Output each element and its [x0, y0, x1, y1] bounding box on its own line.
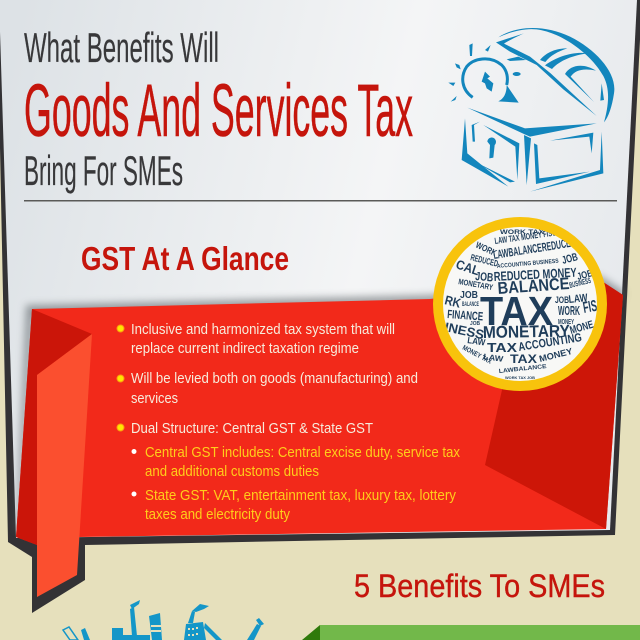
- tax word globe: JOB: [576, 268, 594, 283]
- bullet list: [117, 321, 460, 523]
- right fold: [485, 280, 623, 529]
- tax word globe: LAWBALANCEREDUCE: [492, 236, 572, 262]
- title: Bring For SMEs: [24, 147, 183, 194]
- tax word globe: RK: [443, 292, 463, 311]
- tax word globe: WORK: [558, 303, 580, 318]
- tax word globe: TAX: [487, 340, 517, 355]
- icon: treasure chest with light bulb: [448, 28, 614, 192]
- tax word globe: WORK: [474, 240, 499, 258]
- section heading: 5 Benefits To SMEs: 5 Benefits To SMEs: [354, 568, 605, 604]
- tax word globe: LAW: [568, 292, 589, 306]
- left fold, orange strip: [37, 334, 92, 597]
- tax word globe: REDUCED MONEY: [493, 265, 577, 284]
- tax word globe: JOB: [460, 290, 478, 301]
- tax word globe: MONEY: [558, 319, 574, 326]
- bullet list: State GST: VAT, entertainment tax, luxury tax, lottery: [145, 487, 456, 504]
- tax word globe: TAX: [480, 288, 553, 334]
- bullet list: services: [131, 390, 178, 407]
- panel shadow: [16, 276, 625, 530]
- tax word globe: ACCOUNTING BUSINESS: [497, 259, 559, 270]
- tax word globe: LAW: [467, 335, 486, 348]
- bullet list: Inclusive and harmonized tax system that will: [131, 321, 395, 338]
- chimney factory: [112, 600, 162, 640]
- tax word globe: LAW TAX MONEY FISC: [494, 227, 557, 246]
- tax word globe: JOB: [475, 269, 494, 285]
- bullet list: and additional customs duties: [145, 463, 319, 480]
- tax word globe: LAW: [483, 352, 504, 364]
- bullet list: Dual Structure: Central GST & State GST: [131, 420, 373, 437]
- tax word globe: MONEY TAX: [461, 345, 493, 366]
- title: [24, 24, 413, 194]
- tax word globe: MONETARY: [483, 321, 571, 342]
- tax word globe: JOB: [555, 295, 569, 305]
- left fold, dark part: [16, 309, 92, 545]
- tax word globe: ACCOUNTING: [517, 330, 583, 354]
- window factory: [184, 604, 222, 640]
- small tilted factory: [63, 627, 90, 640]
- tax word globe: JOB: [470, 321, 480, 327]
- icon: factories skyline: [63, 600, 264, 640]
- tax word globe: BUSINESS: [568, 276, 592, 290]
- tax word globe: FINANCE: [447, 307, 484, 324]
- tax word globe: LAWBALANCE: [499, 364, 547, 375]
- tax word globe: MONETARY: [458, 277, 494, 292]
- panel: red banner: [16, 280, 623, 597]
- tax word globe: WORK TAX JOB: [505, 375, 535, 380]
- tax word globe: BALANCE: [462, 302, 479, 308]
- section heading: GST At A Glance: GST At A Glance: [81, 240, 289, 277]
- tax word globe: WORK TAX: [500, 230, 544, 236]
- bullet list: replace current indirect taxation regime: [131, 340, 359, 357]
- tax word globe: BALANCE: [497, 274, 570, 298]
- bullet list: Central GST includes: Central excise duty, service tax: [145, 444, 460, 461]
- title: What Benefits Will: [24, 24, 219, 71]
- tax word globe: JOB: [561, 251, 579, 267]
- tax word globe: INESS: [443, 319, 486, 342]
- bullet list: Will be levied both on goods (manufacturing) and: [131, 370, 418, 387]
- green panel: [302, 625, 640, 640]
- tax word globe: FIS: [582, 298, 599, 317]
- tax word globe: REDUCED: [470, 252, 499, 269]
- tax word globe: MONEY: [538, 346, 573, 364]
- tax word globe: [433, 217, 607, 391]
- tax word globe: TAX: [510, 352, 537, 366]
- tax word globe: CAL: [454, 257, 482, 278]
- tax word globe: MONE: [569, 319, 595, 337]
- small chimney: [247, 618, 264, 640]
- bullet list: taxes and electricity duty: [145, 506, 290, 523]
